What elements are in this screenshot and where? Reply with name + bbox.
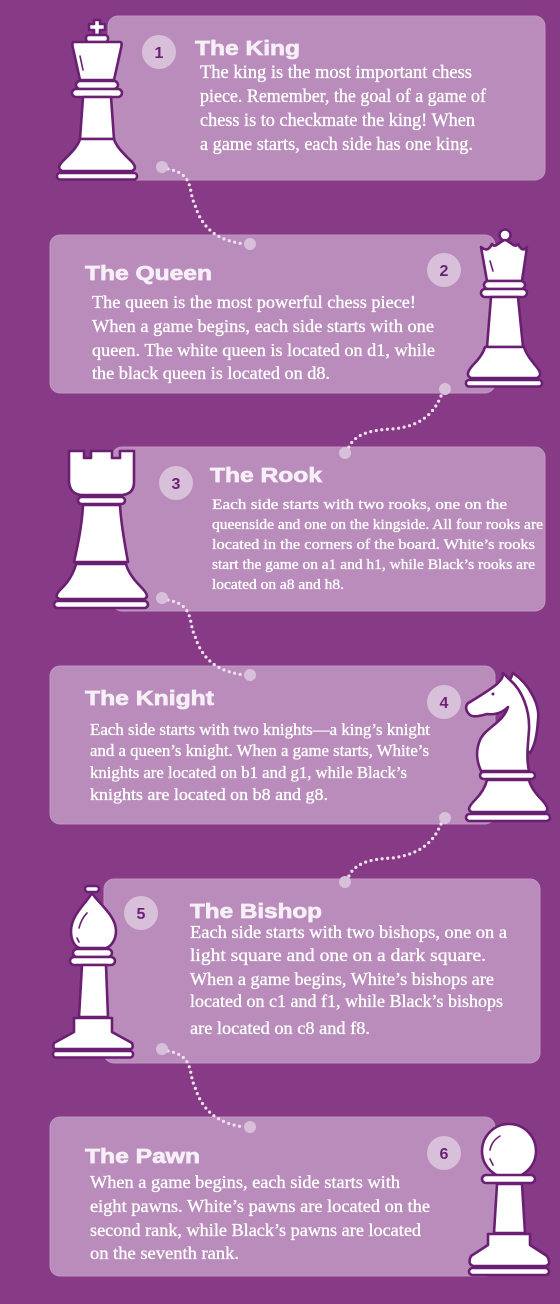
connector: king to queen (156, 161, 256, 250)
number badge 3: 3 (172, 476, 181, 493)
text: bishop description: are located on c8 and f8. (190, 1018, 370, 1038)
connector: knight to bishop (339, 812, 451, 888)
number badge 6 (427, 1136, 461, 1170)
heading: The Bishop: The Bishop (190, 901, 322, 923)
icon: bishop piece (53, 886, 133, 1058)
panel: The Bishop (104, 879, 540, 1063)
panel: The Knight (50, 666, 495, 824)
connector: queen to rook (339, 383, 451, 459)
number badge 4: 4 (440, 695, 449, 712)
number badge 6: 6 (440, 1146, 449, 1163)
heading: The Pawn: The Pawn (85, 1146, 200, 1168)
text: queen description: the black queen is located on d8. (92, 363, 330, 383)
text: pawn description: When a game begins, each side starts with (90, 1172, 400, 1192)
number badge 4 (427, 685, 461, 719)
number badge 5 (124, 896, 158, 930)
text: rook description (212, 497, 543, 593)
text: rook description: queenside and one on the kingside. All four rooks are (212, 517, 543, 533)
text: rook description: located on a8 and h8. (212, 577, 344, 593)
panel: The King (108, 16, 545, 180)
text: pawn description: second rank, while Black’s pawns are located (90, 1220, 421, 1240)
connector: bishop to pawn (156, 1043, 256, 1133)
text: knight description: knights are located on b1 and g1, while Black’s (90, 763, 407, 782)
text: pawn description (90, 1172, 430, 1263)
text: bishop description (190, 922, 507, 1038)
text: king description (200, 63, 487, 155)
text: queen description: queen. The white queen is located on d1, while (92, 340, 435, 360)
heading: The King: The King (195, 38, 300, 60)
number badge 2: 2 (440, 263, 449, 280)
icon: queen piece (466, 230, 542, 386)
number badge 1 (142, 35, 176, 69)
icon: king piece (57, 20, 137, 180)
text: knight description (90, 720, 430, 804)
icon: rook piece (54, 451, 148, 608)
icon: pawn piece (469, 1124, 549, 1275)
text: bishop description: When a game begins, White’s bishops are (190, 969, 494, 989)
heading: The Rook: The Rook (210, 465, 323, 487)
text: bishop description: light square and one on a dark square. (190, 945, 486, 965)
text: king description: chess is to checkmate the king! When (200, 111, 475, 131)
text: bishop description: Each side starts with two bishops, one on a (190, 922, 507, 942)
text: rook description: located in the corners of the board. White’s rooks (212, 537, 535, 553)
icon: knight piece (466, 673, 550, 821)
text: king description: piece. Remember, the goal of a game of (200, 87, 487, 107)
number badge 5: 5 (137, 906, 146, 923)
text: pawn description: on the seventh rank. (90, 1243, 239, 1263)
panel: The Pawn (50, 1117, 495, 1276)
connector: rook to knight (156, 592, 256, 681)
text: queen description: When a game begins, each side starts with one (92, 316, 434, 336)
number badge 3 (159, 466, 193, 500)
text: knight description: and a queen’s knight. When a game starts, White’s (90, 741, 429, 760)
text: pawn description: eight pawns. White’s pawns are located on the (90, 1196, 430, 1216)
number badge 1: 1 (155, 45, 164, 62)
panel: The Rook (112, 447, 545, 611)
number badge 2 (427, 253, 461, 287)
text: queen description: The queen is the most powerful chess piece! (92, 292, 416, 312)
text: rook description: Each side starts with two rooks, one on the (212, 497, 507, 513)
text: knight description: Each side starts with two knights—a king’s knight (90, 720, 430, 739)
text: king description: The king is the most important chess (200, 63, 472, 83)
heading: The Queen: The Queen (85, 263, 212, 285)
panel: The Queen (50, 235, 495, 393)
text: knight description: knights are located on b8 and g8. (90, 785, 328, 804)
heading: The Knight: The Knight (85, 688, 214, 710)
text: rook description: start the game on a1 and h1, while Black’s rooks are (212, 557, 535, 573)
text: bishop description: located on c1 and f1, while Black’s bishops (190, 991, 503, 1011)
text: king description: a game starts, each side has one king. (200, 135, 473, 155)
text: queen description (92, 292, 435, 383)
